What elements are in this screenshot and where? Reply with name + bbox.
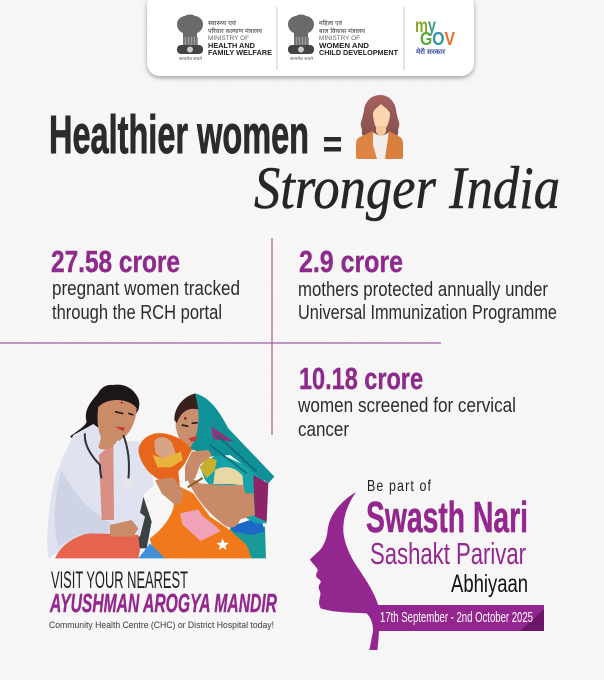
equals sign [324, 137, 341, 152]
myGov logo: मेरी सरकार [415, 47, 446, 56]
stat: 2.9 crore mothers: mothers protected annually under [298, 279, 548, 301]
women and child ministry name: WOMEN AND [319, 41, 370, 50]
health ministry name: परिवार कल्याण मंत्रालय [208, 27, 263, 35]
icon: national emblem, women and child ministry: सत्यमेव जयते [290, 56, 314, 61]
campaign title text: Abhiyaan [451, 570, 528, 598]
campaign title text [366, 478, 528, 598]
health ministry name: MINISTRY OF [208, 35, 249, 42]
myGov logo: GOV [420, 29, 455, 49]
stat: 27.58 crore pregnant women: 27.58 crore [51, 244, 180, 279]
stat: 10.18 crore women screened: cancer [298, 419, 349, 441]
icon: national emblem, women and child ministry [288, 14, 314, 61]
stat: 27.58 crore pregnant women: pregnant women tracked [52, 278, 240, 300]
campaign title text: Sashakt Parivar [370, 536, 526, 571]
visit your nearest text block [49, 567, 277, 630]
mother [138, 393, 274, 558]
doctor [47, 385, 154, 558]
baby in orange wrap [138, 433, 192, 505]
icon: woman [356, 95, 403, 159]
health ministry name: FAMILY WELFARE [208, 48, 272, 57]
photo: doctor with mother and baby [47, 385, 274, 558]
date banner [375, 605, 544, 631]
heading: Stronger India: Stronger India [254, 155, 560, 221]
myGov logo [415, 16, 455, 56]
icon: national emblem, health ministry [177, 14, 203, 61]
health ministry name: स्वास्थ्य एवं [208, 20, 237, 27]
stat: 2.9 crore mothers: 2.9 crore [299, 244, 403, 279]
campaign logo: face silhouette [310, 492, 379, 650]
header logo card [147, 0, 474, 76]
vertical divider [271, 238, 273, 435]
stat: 27.58 crore pregnant women: through the RCH portal [52, 302, 222, 324]
women and child ministry name: CHILD DEVELOPMENT [319, 48, 398, 57]
stat: 10.18 crore women screened: women screened for cervical [297, 395, 516, 417]
campaign title text: Be part of [367, 478, 431, 495]
stat: 2.9 crore mothers [298, 244, 557, 324]
women and child ministry name: महिला एवं [319, 19, 343, 27]
myGov logo: my [415, 16, 436, 37]
horizontal divider [0, 342, 441, 344]
women and child ministry name [319, 19, 398, 57]
icon: national emblem, health ministry: सत्यमेव जयते [179, 56, 203, 61]
women and child ministry name: MINISTRY OF [319, 35, 360, 42]
stat: 10.18 crore women screened: 10.18 crore [299, 361, 423, 396]
visit your nearest text block: VISIT YOUR NEAREST [51, 567, 188, 594]
stat: 10.18 crore women screened [297, 361, 516, 441]
star on skirt [216, 538, 229, 550]
visit your nearest text block: AYUSHMAN AROGYA MANDIR [49, 588, 277, 618]
women and child ministry name: बाल विकास मंत्रालय [319, 27, 366, 35]
health ministry name [208, 20, 272, 57]
heading: Healthier women: Healthier women [49, 105, 309, 165]
health ministry name: HEALTH AND [208, 41, 256, 50]
stat: 27.58 crore pregnant women [51, 244, 240, 324]
visit your nearest text block: Community Health Centre (CHC) or District Hospital today! [49, 620, 274, 630]
